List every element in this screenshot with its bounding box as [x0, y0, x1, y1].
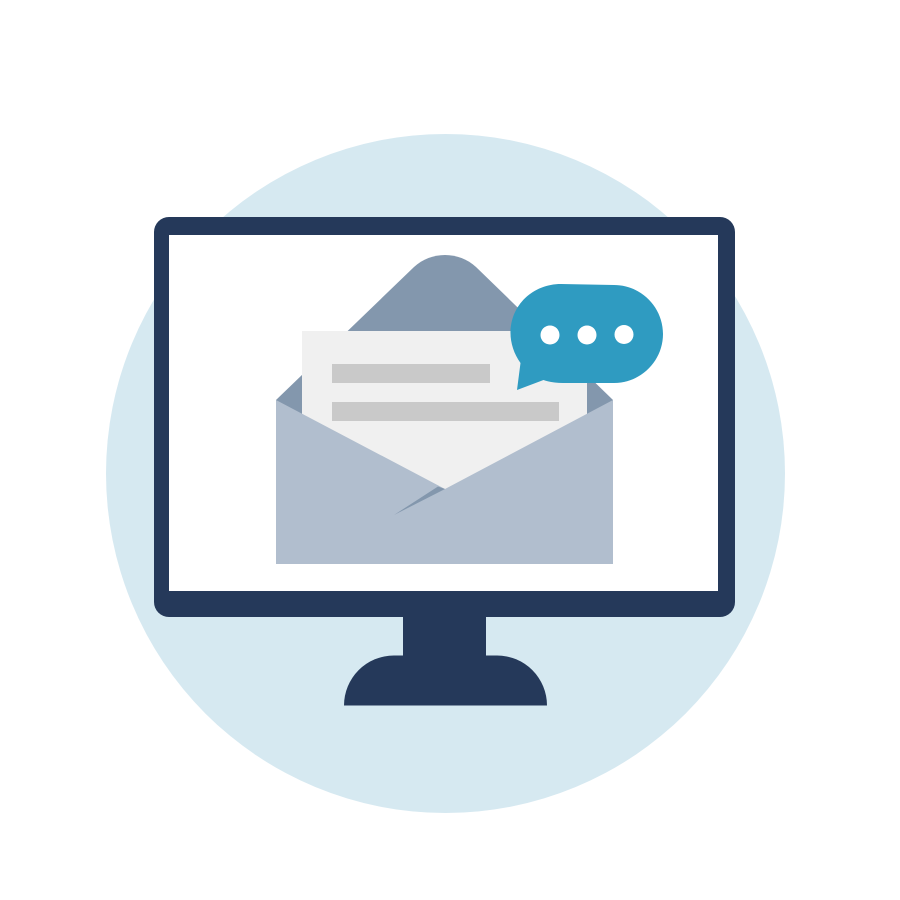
monitor stand base — [344, 656, 547, 706]
speech bubble — [510, 284, 663, 390]
monitor frame — [154, 217, 735, 617]
bubble dot 3 — [614, 325, 634, 344]
envelope front — [276, 400, 613, 564]
envelope fold shadow — [394, 486, 445, 515]
letter sheet — [302, 331, 587, 521]
envelope — [276, 255, 613, 564]
background circle — [106, 134, 785, 813]
bubble body — [510, 284, 663, 390]
bubble dot 2 — [578, 326, 596, 344]
letter line 1 — [332, 364, 490, 383]
letter — [302, 331, 587, 521]
envelope back flap — [276, 255, 613, 480]
bubble dot 1 — [540, 326, 560, 344]
monitor screen — [169, 235, 718, 591]
monitor stand neck — [403, 610, 486, 660]
monitor — [154, 217, 735, 706]
letter line 2 — [332, 402, 559, 421]
